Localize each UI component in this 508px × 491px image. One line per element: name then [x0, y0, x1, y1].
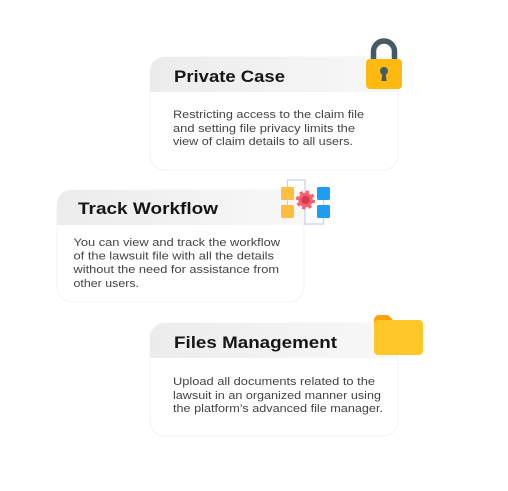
- heading: private case: Private Case: [174, 67, 285, 86]
- icon: padlock: [366, 41, 402, 89]
- icon: workflow diagram: [281, 180, 330, 224]
- text block: files management description: Upload all documents related to the: [173, 376, 375, 388]
- text block: track workflow description: other users.: [74, 278, 139, 290]
- text block: track workflow description: of the lawsuit file with all the details: [74, 250, 274, 262]
- icon: folder: [374, 315, 423, 355]
- panel: files management: [150, 323, 398, 436]
- text block: track workflow description: [72, 237, 281, 290]
- text block: files management description: lawsuit in an organized manner using: [173, 390, 381, 402]
- text block: track workflow description: You can view and track the workflow: [74, 237, 281, 249]
- panel: track workflow: [57, 190, 304, 302]
- text block: private case description: and setting file privacy limits the: [173, 123, 355, 135]
- heading: files management: Files Management: [174, 333, 337, 352]
- text block: private case description: [173, 109, 364, 148]
- text block: files management description: the platform’s advanced file manager.: [173, 403, 383, 415]
- panel: private case: [150, 57, 398, 170]
- text block: track workflow description: without the need for assistance from: [72, 264, 279, 276]
- text block: private case description: Restricting access to the claim file: [173, 109, 364, 121]
- text block: private case description: view of claim details to all users.: [173, 136, 353, 148]
- heading: track workflow: Track Workflow: [78, 199, 219, 218]
- text block: files management description: [173, 376, 383, 415]
